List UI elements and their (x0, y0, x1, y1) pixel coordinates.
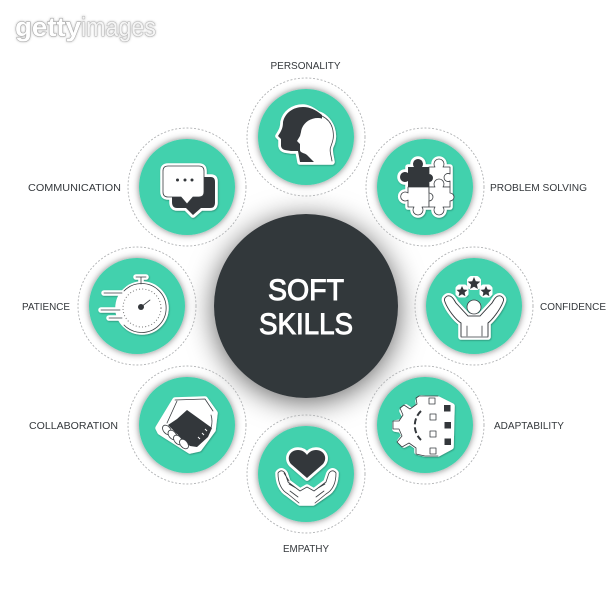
watermark: gettyimages: getty (15, 12, 81, 42)
icon: puzzle (400, 159, 454, 215)
watermark: gettyimages (15, 12, 156, 42)
icon: person with stars (444, 277, 504, 337)
icon: speech bubbles (163, 166, 215, 215)
panel: patience (22, 247, 196, 365)
icon: gear with squares (393, 396, 452, 456)
panel: personality (247, 60, 365, 196)
panel: collaboration (29, 366, 246, 484)
label: patience: PATIENCE (22, 301, 70, 313)
center circle: soft skills: SKILLS (259, 308, 353, 341)
panel: empathy (247, 415, 365, 555)
label: communication: COMMUNICATION (28, 182, 121, 194)
panel: confidence (415, 247, 606, 365)
center circle: soft skills (214, 214, 398, 398)
center circle: soft skills: SOFT (268, 274, 344, 307)
icon: two heads (278, 107, 333, 162)
label: adaptability: ADAPTABILITY (494, 420, 564, 432)
icon: stopwatch (101, 277, 166, 332)
label: personality: PERSONALITY (270, 60, 340, 72)
label: problem solving: PROBLEM SOLVING (490, 182, 587, 194)
panel: problem solving (366, 128, 587, 246)
watermark: gettyimages: images (81, 12, 156, 42)
label: empathy: EMPATHY (283, 543, 329, 555)
panel: adaptability (366, 366, 564, 484)
icon: heart in hands (278, 450, 336, 503)
panel: communication (28, 128, 246, 246)
label: confidence: CONFIDENCE (540, 301, 606, 313)
label: collaboration: COLLABORATION (29, 420, 118, 432)
icon: handshake (158, 399, 215, 451)
